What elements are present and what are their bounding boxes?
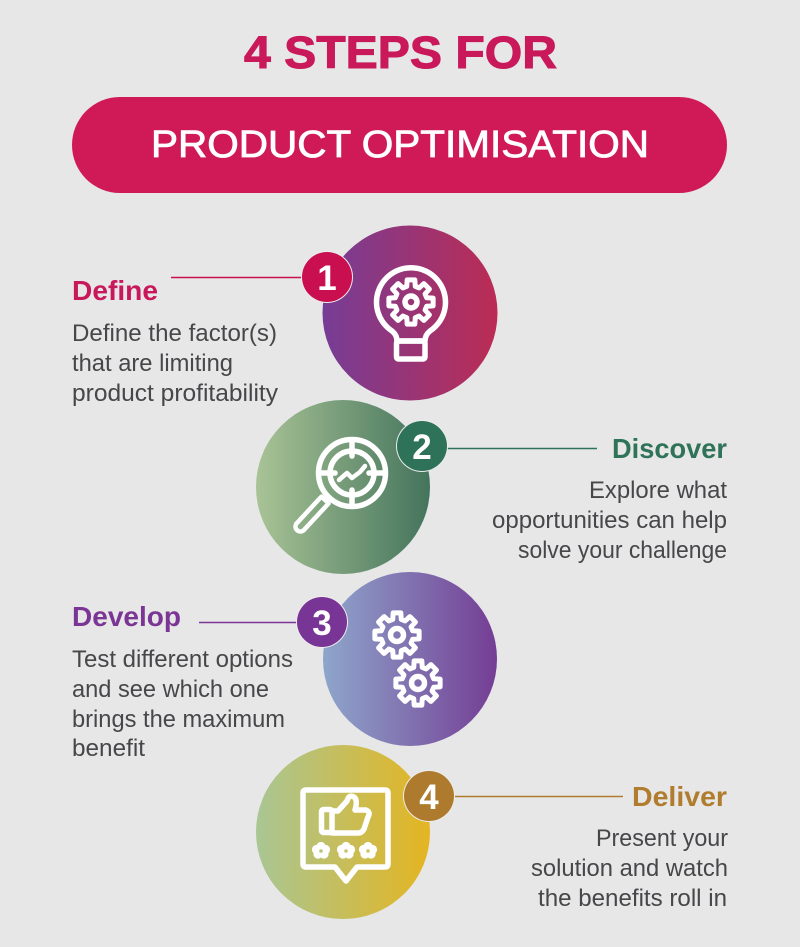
- circle 1: lightbulb with gear: [322, 226, 498, 400]
- circle 2: magnifier with chart: [256, 400, 430, 574]
- step 2 text: Discover: solve your challenge: [518, 537, 727, 564]
- title banner: [72, 97, 727, 193]
- title banner: PRODUCT OPTIMISATION: [151, 124, 649, 166]
- step 1 text: Define: Define: [72, 275, 158, 306]
- step 2 text: Discover: opportunities can help: [492, 507, 727, 534]
- step 3 text: Develop: and see which one: [72, 676, 269, 703]
- step 4 text: Deliver: Deliver: [632, 781, 727, 812]
- step 1 text: Define: that are limiting: [72, 350, 233, 377]
- step 4 text: Deliver: solution and watch: [531, 855, 728, 882]
- step 4 text: Deliver: Present your: [596, 825, 728, 852]
- step 1 connector and badge: 1: [317, 259, 337, 298]
- step 2 connector and badge: 2: [412, 428, 432, 467]
- step 4 connector and badge: [403, 770, 623, 822]
- title: 4 STEPS FOR: [244, 27, 557, 78]
- step 3 connector and badge: 3: [312, 604, 332, 643]
- circle 3: two gears: [323, 572, 497, 746]
- step 3 text: Develop: brings the maximum: [72, 706, 285, 733]
- step 1 text: Define: Define the factor(s): [72, 320, 277, 347]
- step 3 text: Develop: [72, 601, 293, 762]
- step 2 text: Discover: Explore what: [589, 477, 727, 504]
- circle 4: rating speech bubble: [256, 745, 430, 919]
- step 1 text: Define: [72, 275, 278, 407]
- step 2 text: Discover: Discover: [612, 433, 727, 464]
- step 4 text: Deliver: the benefits roll in: [538, 885, 727, 912]
- step 1 connector and badge: [171, 251, 353, 303]
- step 3 text: Develop: benefit: [72, 735, 145, 762]
- icon: rating flowers: [312, 842, 377, 859]
- step 2 text: Discover: [492, 433, 727, 564]
- step 3 text: Develop: Test different options: [72, 646, 293, 673]
- step 4 text: Deliver: [531, 781, 728, 912]
- step 3 text: Develop: Develop: [72, 601, 181, 632]
- step 4 connector and badge: 4: [419, 778, 439, 817]
- step 2 connector and badge: [396, 420, 597, 472]
- step 1 text: Define: product profitability: [72, 380, 278, 407]
- step 3 connector and badge: [199, 596, 348, 648]
